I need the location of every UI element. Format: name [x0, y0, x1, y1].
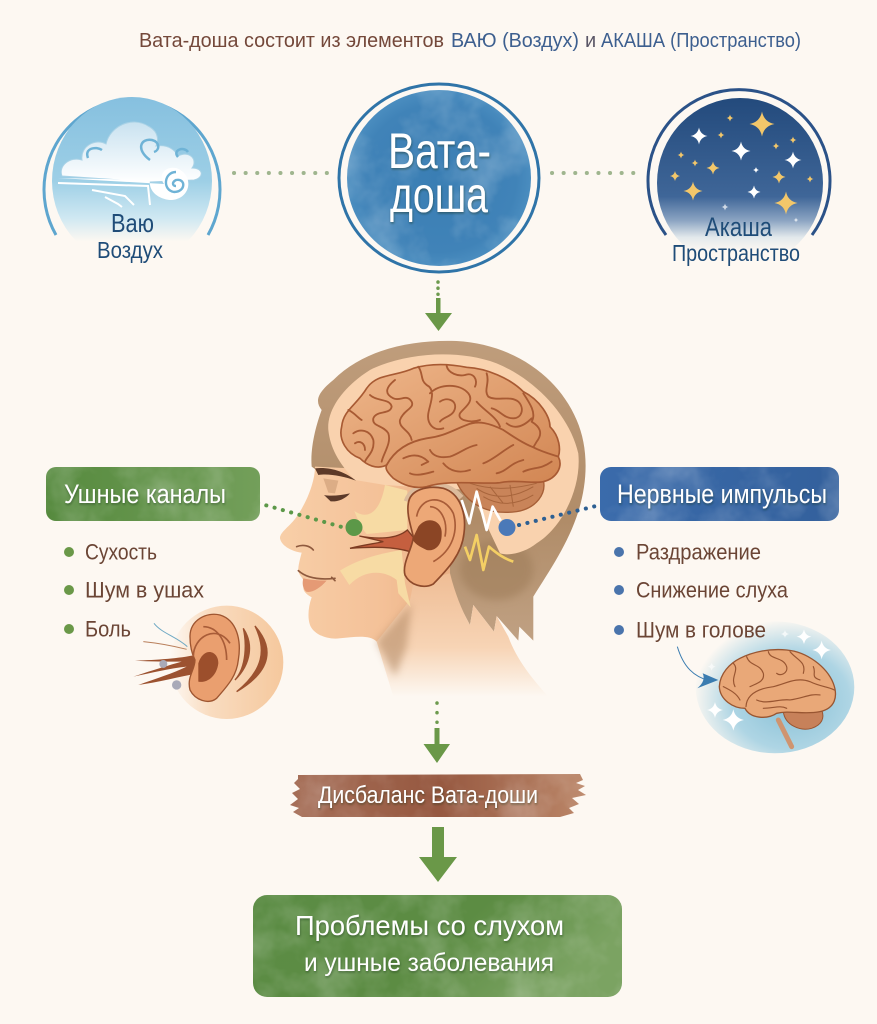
fill: watercolor disc: [347, 90, 531, 266]
gust lines: [133, 655, 198, 685]
icon: stars: [670, 112, 814, 222]
panel: Akasha space circle: [648, 90, 830, 268]
nose and lips: [297, 545, 335, 581]
ear canal: [350, 530, 418, 552]
thin gust: [143, 642, 187, 649]
folds: [723, 652, 834, 708]
panel: Vata dosha circle: [339, 84, 539, 272]
list: nerve symptoms: [614, 540, 789, 642]
lower lip: [303, 578, 327, 592]
bone arc behind ear: [407, 485, 461, 502]
panel: Vayu air circle: [44, 97, 220, 265]
brain cerebrum: [341, 364, 560, 487]
heading line 1: Проблемы со слухом: [295, 910, 564, 941]
brain folds: [348, 366, 558, 475]
illustration: head profile with brain and ear: [280, 341, 586, 697]
icon: cloud and wind: [58, 122, 201, 207]
list: ear symptoms: Боль: [85, 616, 131, 642]
cerebellum folds: [470, 483, 537, 507]
marker: green dot: [346, 519, 362, 536]
label: ear canals: Ушные каналы: [64, 479, 226, 509]
eye: [324, 493, 350, 501]
label: Space: Пространство: [672, 240, 800, 266]
cerebellum: [783, 710, 823, 729]
icon: watercolor sky: [52, 97, 212, 265]
ear: [404, 487, 465, 586]
panel: imbalance brush stroke: [290, 774, 586, 817]
inner ear: [413, 520, 442, 550]
connector: green dotted leader: [258, 503, 342, 527]
brain cerebellum: [455, 478, 544, 512]
list: nerve symptoms: Раздражение: [636, 540, 761, 564]
label: Vata: Вата-: [388, 123, 491, 179]
list: ear symptoms: Шум в ушах: [85, 578, 204, 602]
label: Akasha: Акаша: [705, 212, 773, 242]
grey particles: [159, 660, 181, 690]
arrow: head to imbalance: [424, 703, 450, 763]
label: nerve impulses: Нервные импульсы: [617, 479, 827, 509]
panel: ear canals: [46, 467, 260, 521]
title highlighted elements: АКАША (Пространство): [601, 30, 801, 52]
panel: nerve impulses: [600, 467, 839, 521]
arrow: imbalance to problems: [419, 827, 457, 882]
ear fold: [417, 500, 455, 562]
illustration: ear with air gusts: [133, 606, 283, 719]
marker: blue dot: [498, 519, 516, 536]
connector: left dotted line: [234, 171, 328, 175]
sinus upper: [354, 485, 407, 534]
sinus lower: [340, 550, 411, 607]
skull interior: [328, 354, 579, 554]
neck: [377, 573, 548, 697]
hair shading: [460, 540, 533, 600]
pointer arrow: [677, 647, 710, 681]
icon: night sky: [657, 98, 823, 268]
list: ear symptoms: [64, 540, 204, 642]
panel: result box: [253, 895, 622, 997]
label: imbalance: Дисбаланс Вата-доши: [318, 782, 538, 809]
signal: white nerve wave: [462, 492, 501, 530]
brain stem: [778, 720, 792, 747]
title: Вата-доша состоит из элементов: [139, 30, 444, 52]
illustration: small brain on blue cloud: [677, 621, 854, 753]
sound arcs: [235, 626, 267, 692]
blue backdrop: [696, 621, 854, 753]
face: [280, 467, 450, 642]
peach backdrop: [170, 606, 283, 719]
title highlighted elements: и: [585, 30, 596, 52]
list: ear symptoms: Сухость: [85, 540, 157, 564]
cerebrum: [719, 650, 835, 717]
title highlighted elements: [451, 30, 801, 52]
hair: [311, 341, 586, 641]
label: dosha: доша: [390, 167, 488, 223]
heading line 2: и ушные заболевания: [304, 949, 554, 977]
blue wind: [154, 623, 187, 647]
label: Vayu: Ваю: [111, 208, 154, 238]
small ear: [189, 614, 239, 701]
list: nerve symptoms: Снижение слуха: [636, 578, 789, 602]
sparkles: [707, 629, 831, 731]
connector: right dotted line: [552, 171, 638, 175]
title highlighted elements: ВАЮ (Воздух): [451, 30, 579, 52]
label: Air: Воздух: [97, 237, 163, 263]
eyelid shade: [323, 478, 338, 493]
eyebrow: [315, 468, 356, 481]
pointer arrow head: [697, 673, 718, 688]
jaw shadow: [377, 603, 412, 677]
connector: blue dotted leader: [519, 505, 600, 525]
signal: yellow wave: [465, 535, 513, 570]
list: nerve symptoms: Шум в голове: [636, 618, 766, 642]
arrow: Vata dosha to head: [425, 282, 452, 331]
